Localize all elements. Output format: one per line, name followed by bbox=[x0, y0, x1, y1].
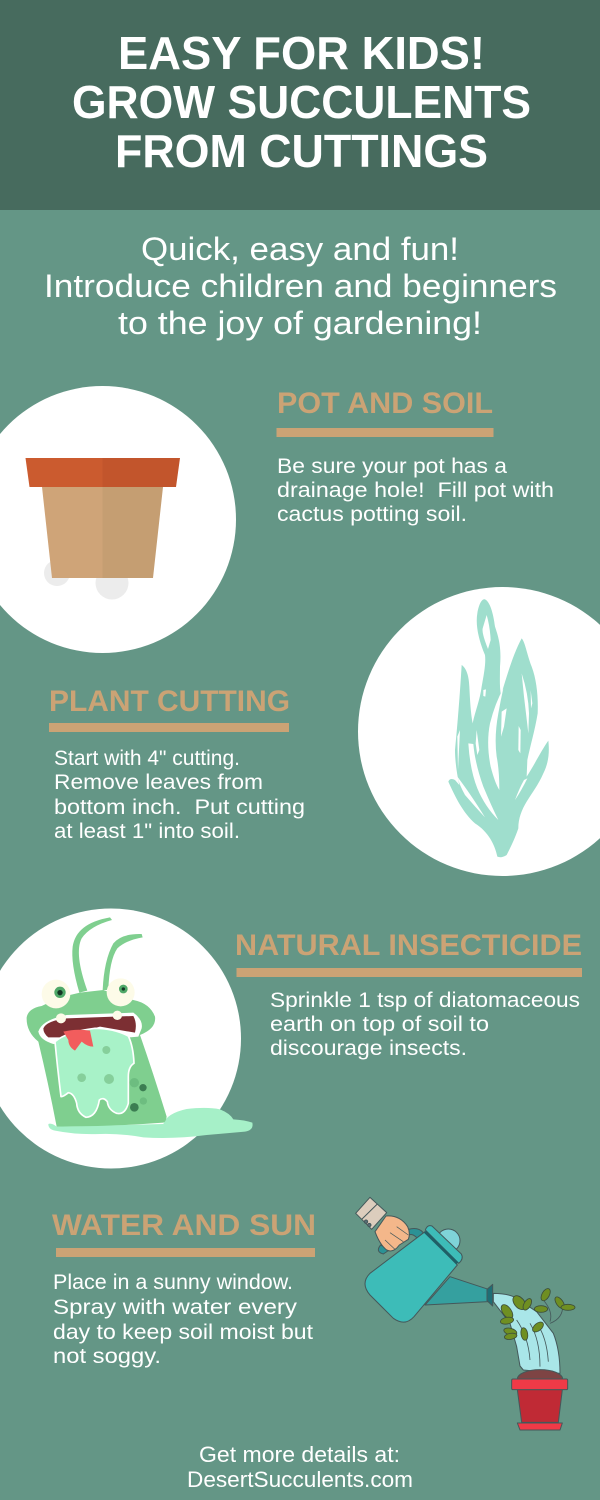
text: water and sun instructions: Spray with water every bbox=[53, 1296, 298, 1319]
text: plant cutting instructions: Remove leaves from bbox=[54, 771, 263, 794]
title banner bbox=[0, 0, 600, 210]
text: natural insecticide instructions bbox=[270, 989, 580, 1060]
panel: natural insecticide illustration bbox=[0, 908, 253, 1168]
heading: plant cutting: PLANT CUTTING bbox=[49, 685, 290, 718]
icon: hand watering a potted plant bbox=[356, 1197, 575, 1430]
icon: terracotta pot bbox=[26, 458, 180, 600]
heading: water and sun: WATER AND SUN bbox=[52, 1209, 316, 1242]
panel: water and sun text bbox=[52, 1209, 316, 1368]
subtitle bbox=[44, 231, 557, 341]
footer bbox=[187, 1442, 413, 1492]
title: FROM CUTTINGS bbox=[115, 125, 488, 177]
title: GROW SUCCULENTS bbox=[72, 76, 531, 128]
footer: DesertSucculents.com bbox=[187, 1467, 413, 1492]
subtitle: Introduce children and beginners bbox=[44, 268, 557, 304]
text: water and sun instructions: Place in a sunny window. bbox=[53, 1271, 293, 1294]
text: plant cutting instructions: at least 1" into soil. bbox=[54, 820, 240, 843]
text: plant cutting instructions: Start with 4" cutting. bbox=[54, 747, 240, 770]
panel: plant cutting illustration bbox=[358, 587, 600, 876]
title: EASY FOR KIDS! bbox=[118, 27, 485, 79]
text: plant cutting instructions: bottom inch. Put cutting bbox=[54, 796, 305, 819]
panel: plant cutting text bbox=[49, 685, 305, 843]
text: water and sun instructions: not soggy. bbox=[53, 1345, 161, 1368]
subtitle: to the joy of gardening! bbox=[118, 305, 482, 341]
title bbox=[72, 27, 531, 177]
text: pot and soil instructions: drainage hole! Fill pot with bbox=[277, 479, 554, 502]
text: natural insecticide instructions: earth on top of soil to bbox=[270, 1013, 489, 1036]
footer: Get more details at: bbox=[199, 1442, 400, 1467]
panel: pot and soil text bbox=[276, 387, 554, 526]
heading: natural insecticide: NATURAL INSECTICIDE bbox=[235, 929, 582, 962]
text: natural insecticide instructions: discourage insects. bbox=[270, 1037, 467, 1060]
icon: succulent cutting bbox=[448, 599, 549, 857]
text: water and sun instructions: day to keep soil moist but bbox=[53, 1321, 313, 1344]
icon: green slug monster bbox=[27, 917, 253, 1138]
text: plant cutting instructions bbox=[54, 747, 305, 843]
text: pot and soil instructions: cactus potting soil. bbox=[277, 503, 467, 526]
panel: natural insecticide text bbox=[235, 929, 582, 1060]
text: pot and soil instructions: Be sure your pot has a bbox=[277, 455, 507, 478]
text: pot and soil instructions bbox=[277, 455, 554, 526]
panel: pot and soil illustration bbox=[0, 386, 236, 653]
subtitle: Quick, easy and fun! bbox=[141, 231, 459, 267]
heading: pot and soil: POT AND SOIL bbox=[277, 387, 493, 420]
text: water and sun instructions bbox=[53, 1271, 313, 1368]
text: natural insecticide instructions: Sprinkle 1 tsp of diatomaceous bbox=[270, 989, 580, 1012]
